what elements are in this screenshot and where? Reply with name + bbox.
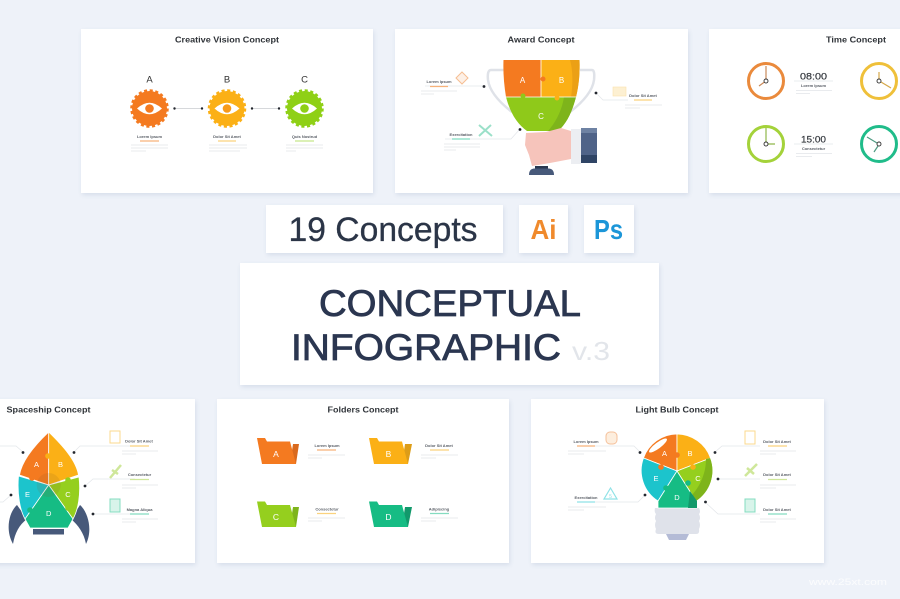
- rocket: E: [25, 490, 30, 499]
- clock yellow: [862, 64, 896, 98]
- callouts: [568, 431, 796, 522]
- heading: folders: Folders Concept: [328, 404, 399, 414]
- heading: spaceship: Spaceship Concept: [6, 404, 91, 414]
- callouts: Consectetur: [128, 472, 152, 477]
- rocket: B: [58, 460, 63, 469]
- captions: Quis Nostrud: [292, 134, 318, 139]
- callouts: Dolor Sit Amet: [763, 439, 791, 444]
- callouts: Magna Aliqua: [127, 507, 153, 512]
- badge: Ai: Ai: [530, 214, 556, 245]
- callouts: Dolor Sit Amet: [763, 472, 791, 477]
- watermark: www.25xt.com: [808, 577, 887, 587]
- heading: award: Award Concept: [508, 34, 575, 44]
- folder D: D: [385, 512, 392, 522]
- callouts: Dolor Sit Amet: [763, 507, 791, 512]
- callouts: Exercitation: [575, 495, 598, 500]
- trophy: C: [538, 112, 544, 121]
- captions: [131, 134, 323, 151]
- captions: Dolor Sit Amet: [213, 134, 241, 139]
- folder A: [257, 438, 299, 464]
- callouts: 5: [609, 494, 612, 500]
- title panel: v.3: [572, 336, 610, 366]
- clock green: [748, 126, 784, 162]
- bulb: B: [687, 449, 693, 458]
- captions: Lorem Ipsum: [137, 134, 162, 139]
- callouts: Lorem Ipsum: [573, 439, 599, 444]
- badge: Ps: [584, 205, 634, 253]
- panel: creative vision concept: [81, 29, 373, 193]
- folder D: [369, 502, 412, 527]
- gear B: [210, 74, 244, 126]
- folder captions: Adipiscing: [429, 506, 450, 512]
- rocket: [9, 432, 89, 544]
- badge: Ai: [519, 205, 568, 253]
- folder captions: Dolor Sit Amet: [425, 443, 453, 448]
- bulb: C: [695, 474, 701, 483]
- gear A: A: [146, 74, 153, 86]
- bulb: E: [653, 474, 659, 483]
- title panel: INFOGRAPHIC: [291, 327, 561, 368]
- callouts: Lorem Ipsum: [426, 79, 452, 84]
- rocket: A: [34, 460, 39, 469]
- badge: 19 concepts: 19 Concepts: [288, 211, 478, 249]
- folder captions: [308, 443, 458, 521]
- bulb: D: [674, 493, 680, 502]
- rocket: C: [65, 490, 71, 499]
- clock teal: [862, 126, 896, 162]
- gear C: [287, 74, 322, 126]
- folder C: [257, 502, 299, 527]
- connectors: [173, 107, 280, 110]
- panel: spaceship concept: [0, 399, 195, 563]
- hand: [525, 128, 597, 175]
- badge: 19 concepts: [266, 205, 503, 253]
- time 08:00: Lorem Ipsum: [801, 83, 826, 88]
- time 15:00: Consectetur: [802, 146, 826, 151]
- folder B: B: [386, 449, 392, 459]
- folder A: A: [273, 449, 279, 459]
- trophy: [488, 60, 594, 131]
- clock orange: [748, 64, 784, 98]
- time 08:00: [794, 72, 833, 94]
- bulb: A: [662, 449, 667, 458]
- title panel: CONCEPTUAL: [319, 283, 581, 324]
- callouts: Dolor Sit Amet: [629, 93, 657, 98]
- heading: time: Time Concept: [826, 34, 886, 44]
- trophy: B: [559, 76, 564, 85]
- rocket: D: [46, 509, 52, 518]
- gear B: B: [224, 74, 230, 86]
- heading: light bulb: Light Bulb Concept: [636, 404, 719, 414]
- callouts: Dolor Sit Amet: [125, 438, 153, 444]
- time 15:00: 15:00: [801, 134, 826, 146]
- gear A: [132, 74, 167, 126]
- time 08:00: 08:00: [800, 72, 827, 82]
- folder B: [369, 438, 412, 464]
- panel: light bulb concept: [531, 399, 824, 563]
- panel: folders concept: [217, 399, 509, 563]
- callouts: [421, 72, 662, 150]
- badge: Ps: Ps: [594, 214, 623, 245]
- folder captions: Consectetur: [315, 506, 339, 512]
- panel: time concept: [709, 29, 900, 193]
- trophy: A: [520, 76, 526, 85]
- panel: award concept: [395, 29, 688, 193]
- time 15:00: [794, 134, 833, 156]
- title panel: [240, 263, 659, 385]
- callouts: Exercitation: [450, 132, 473, 137]
- callouts: [0, 431, 158, 522]
- heading: creative vision: Creative Vision Concept: [175, 34, 279, 44]
- folder captions: Lorem Ipsum: [314, 443, 340, 448]
- gear C: C: [301, 74, 308, 86]
- bulb: [641, 434, 713, 540]
- folder C: C: [273, 512, 279, 522]
